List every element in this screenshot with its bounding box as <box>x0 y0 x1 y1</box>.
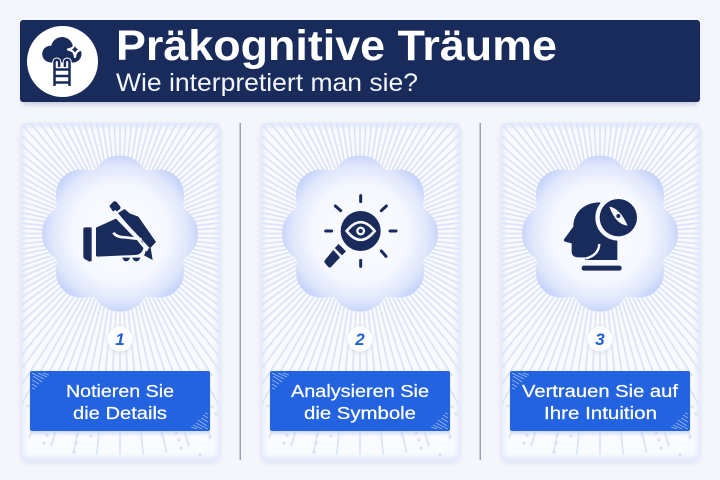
divider 1 <box>240 123 241 460</box>
label button 1: Notieren Sie <box>66 381 174 401</box>
panel: step 2 <box>169 70 554 473</box>
flower badge 2 <box>282 156 438 312</box>
panel: step 1 <box>0 70 314 473</box>
flower badge 1 <box>42 156 198 312</box>
number badge 2: 2 <box>354 330 365 349</box>
number badge 1 <box>107 326 133 353</box>
subtitle: Wie interpretiert man sie? <box>116 69 418 97</box>
icon: hand writing with pencil <box>83 201 156 262</box>
flower badge 3 <box>522 156 678 312</box>
panel: step 3 <box>409 70 720 473</box>
title: Präkognitive Träume <box>116 22 557 70</box>
label button 3: Vertrauen Sie auf <box>522 381 678 401</box>
label button 3 <box>510 371 690 433</box>
icon: cloud with ladder and star <box>27 26 98 97</box>
label button 1 <box>30 371 210 433</box>
number badge 1: 1 <box>115 330 125 349</box>
label button 2: die Symbole <box>304 403 416 423</box>
header banner <box>20 20 700 105</box>
icon: magnifier with eye <box>324 196 396 268</box>
number badge 2 <box>347 326 373 353</box>
label button 2: Analysieren Sie <box>291 381 429 401</box>
label button 3: Ihre Intuition <box>544 403 657 423</box>
label button 2 <box>270 371 450 433</box>
number badge 3: 3 <box>595 330 605 349</box>
divider 2 <box>480 123 481 460</box>
number badge 3 <box>587 326 613 353</box>
label button 1: die Details <box>73 403 167 423</box>
icon: head with compass <box>564 195 641 271</box>
